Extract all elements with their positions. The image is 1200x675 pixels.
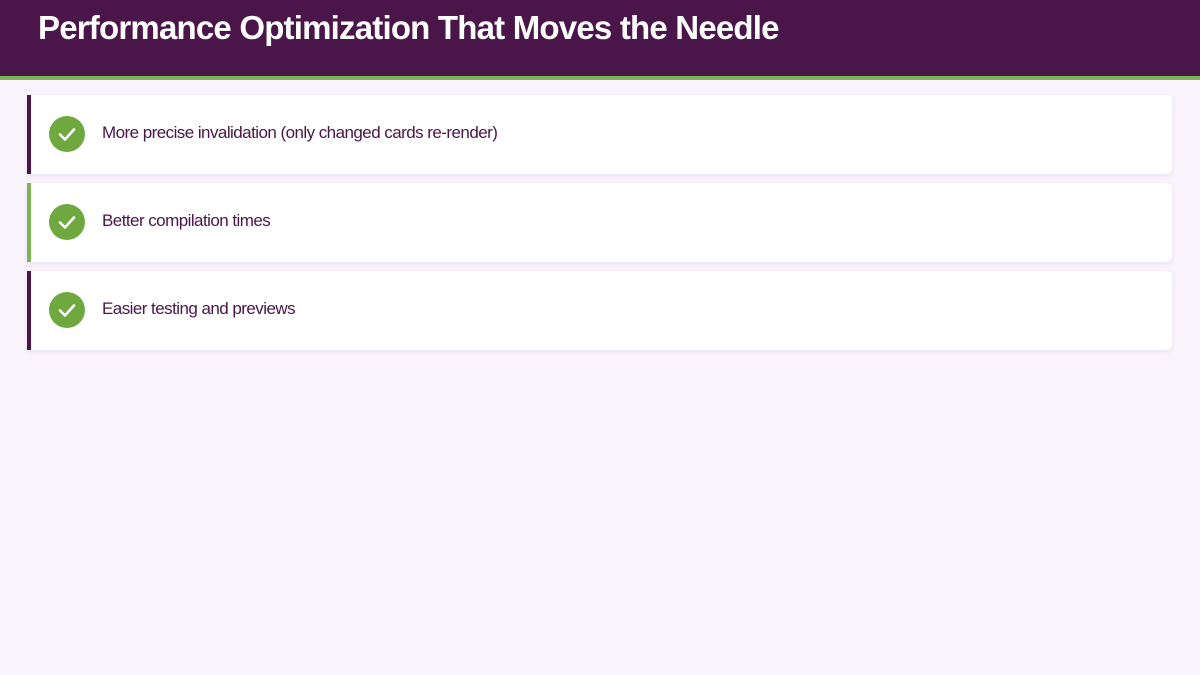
text: More precise invalidation (only changed cards re-render) bbox=[102, 123, 497, 142]
card: testing bbox=[27, 271, 1172, 350]
text: Better compilation times bbox=[102, 211, 270, 230]
card: invalidation bbox=[27, 95, 1172, 174]
icon: check bbox=[49, 116, 85, 152]
icon: check bbox=[49, 292, 85, 328]
text: Easier testing and previews bbox=[102, 299, 295, 318]
card: compilation bbox=[27, 183, 1172, 262]
header bbox=[0, 0, 1200, 80]
icon: check bbox=[49, 204, 85, 240]
title: Performance Optimization That Moves the Needle bbox=[38, 9, 779, 46]
